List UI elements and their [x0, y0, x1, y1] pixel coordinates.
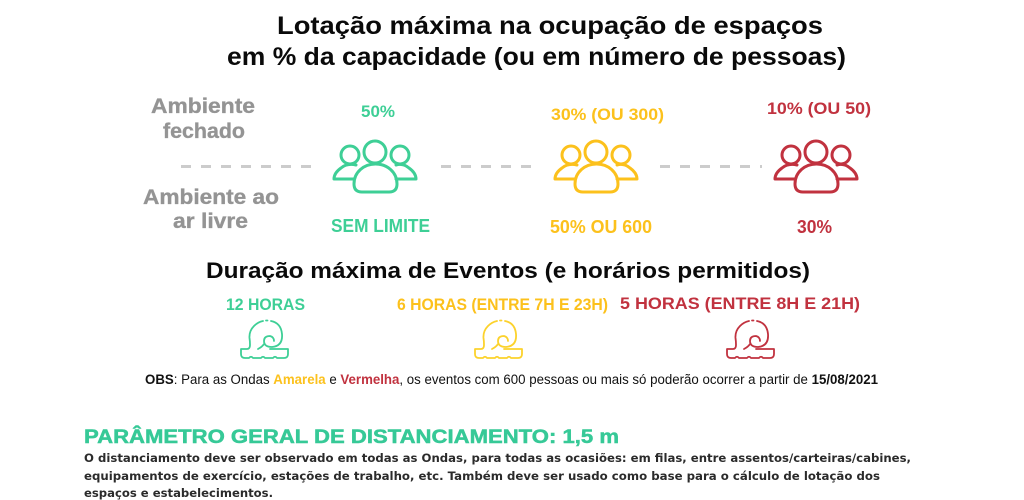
label: ambiente ao ar livre — [143, 186, 279, 233]
value: green indoor: 50% — [361, 102, 395, 121]
capacity: red column — [767, 99, 871, 237]
label: ambiente fechado: Ambiente — [151, 95, 255, 118]
text block: distancing explanation — [84, 451, 911, 500]
label: ambiente fechado: fechado — [163, 120, 245, 143]
duration: green — [226, 295, 305, 358]
title: em % da capacidade (ou em número de pessoas) — [227, 43, 846, 71]
value: yellow outdoor: 50% OU 600 — [550, 217, 652, 237]
icon: wave green — [241, 320, 288, 358]
value: green outdoor: SEM LIMITE — [331, 216, 430, 236]
icon: people green — [334, 141, 416, 192]
text block: distancing explanation: equipamentos de exercício, estações de trabalho, etc. Também deve ser usado como base para o cálculo de lotação dos — [84, 469, 880, 483]
text block: distancing explanation: O distanciamento deve ser observado em todas as Ondas, para todas as ocasiões: em filas, entre assentos/carteiras/cabines, — [84, 451, 911, 465]
heading: general distancing parameter: PARÂMETRO GERAL DE DISTANCIAMENTO: 1,5 m — [84, 426, 619, 448]
label: ambiente ao ar livre: Ambiente ao — [143, 186, 279, 209]
duration: yellow: 6 HORAS (ENTRE 7H E 23H) — [397, 295, 608, 314]
duration: green: 12 HORAS — [226, 295, 305, 314]
title — [227, 12, 846, 71]
capacity: green column — [331, 102, 430, 236]
icon: wave red — [727, 320, 774, 358]
note: OBS: OBS: Para as Ondas Amarela e Vermelha, os eventos com 600 pessoas ou mais só poderão ocorrer a partir de 15/08/2021 — [145, 372, 878, 387]
label: ambiente fechado — [151, 95, 255, 143]
value: yellow indoor: 30% (OU 300) — [551, 105, 664, 124]
value: red indoor: 10% (OU 50) — [767, 99, 871, 118]
duration: red — [620, 294, 860, 358]
icon: wave yellow — [475, 320, 522, 358]
value: red outdoor: 30% — [797, 217, 832, 237]
label: ambiente ao ar livre: ar livre — [173, 210, 248, 233]
icon: people yellow — [555, 141, 637, 192]
capacity: yellow column — [550, 105, 664, 237]
text block: distancing explanation: espaços e estabelecimentos. — [84, 486, 273, 500]
heading: event duration: Duração máxima de Eventos (e horários permitidos) — [206, 258, 810, 283]
title: Lotação máxima na ocupação de espaços — [277, 12, 823, 40]
duration: red: 5 HORAS (ENTRE 8H E 21H) — [620, 294, 860, 313]
duration: yellow — [397, 295, 608, 358]
icon: people red — [775, 141, 857, 192]
